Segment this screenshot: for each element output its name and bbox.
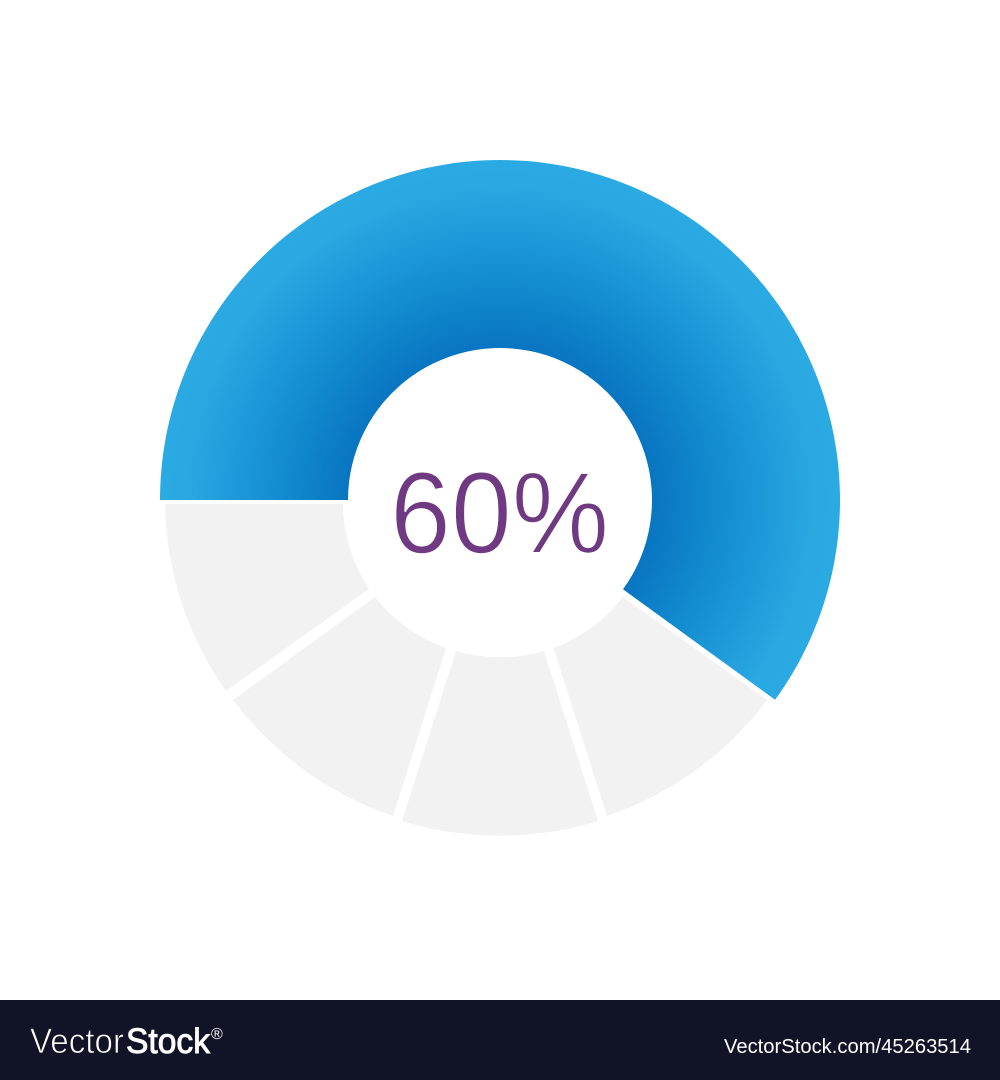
remaining segments: 40 percent xyxy=(165,504,767,836)
footer logo: Vector xyxy=(30,1022,124,1061)
center percentage label: 60% xyxy=(390,448,609,578)
segment: bottom xyxy=(402,651,598,836)
footer logo: ® xyxy=(211,1026,223,1043)
filled arc: 60 percent xyxy=(160,160,840,700)
footer logo: Stock xyxy=(126,1022,210,1061)
segment: lower left xyxy=(233,597,446,816)
footer image id: VectorStock.com/45263514 xyxy=(724,1035,971,1058)
segment: left xyxy=(165,504,369,691)
donut chart xyxy=(160,160,840,836)
segment: lower right xyxy=(554,597,767,816)
footer bar xyxy=(0,1000,1000,1080)
